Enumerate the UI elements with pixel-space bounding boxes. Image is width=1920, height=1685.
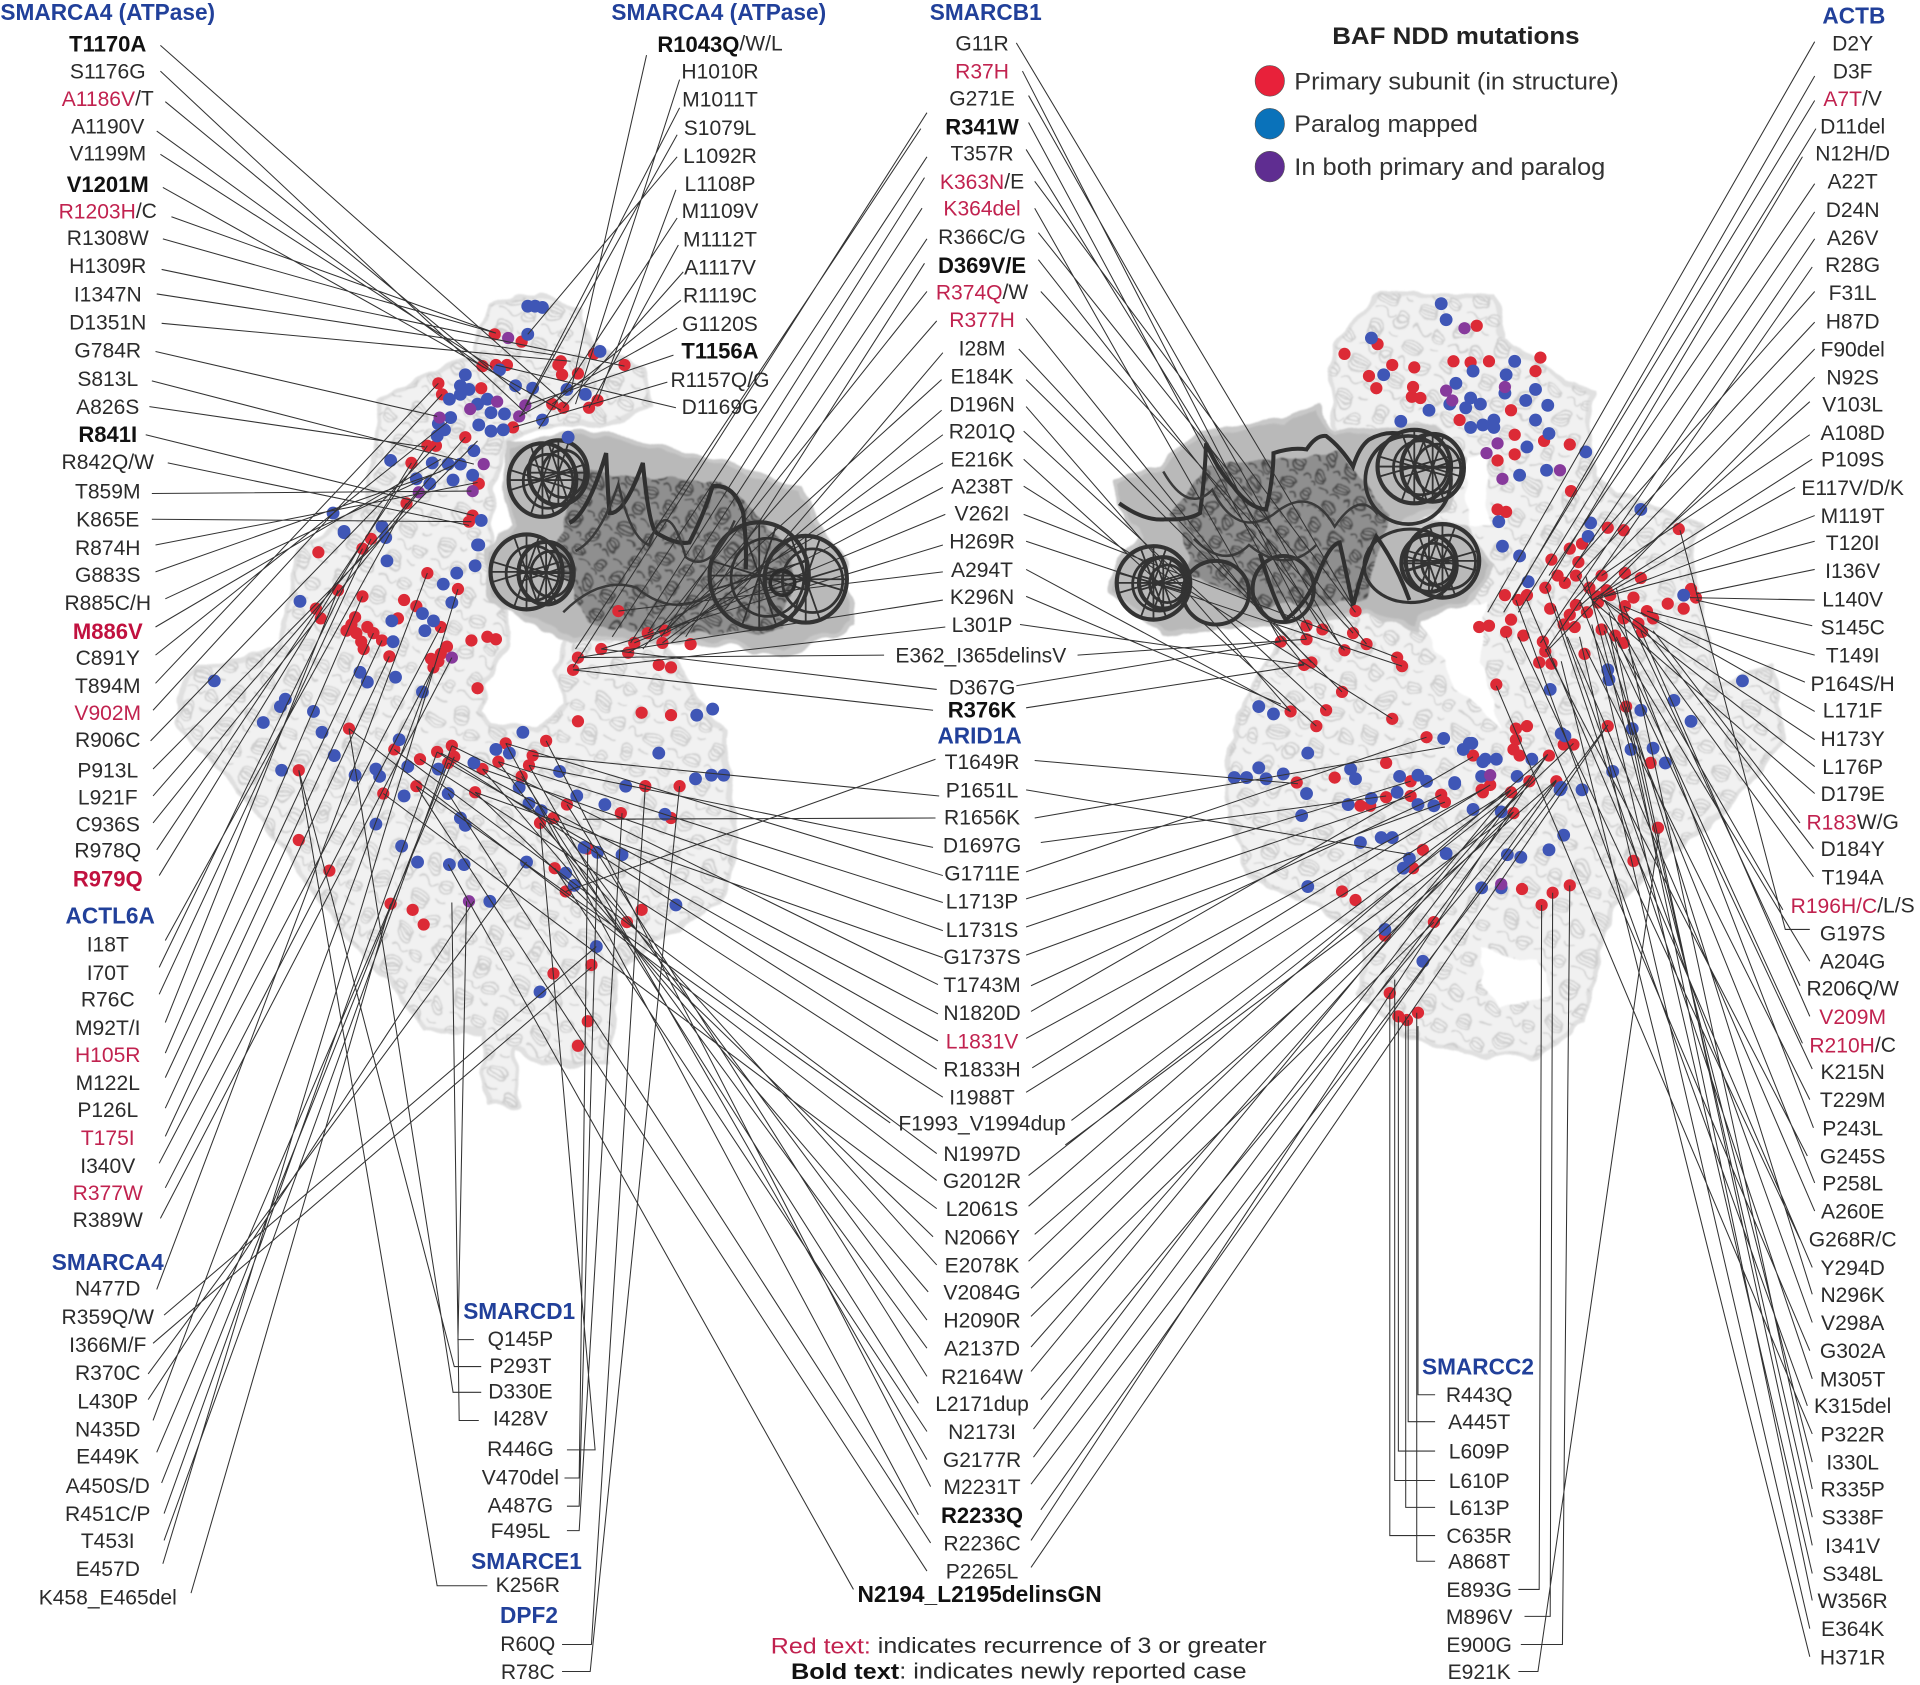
column: SMARCD1 labels: P293T [489,1355,552,1378]
column: ACTB labels [1791,3,1915,1669]
column: ACTB labels: K315del [1814,1395,1891,1418]
column: ACTB labels: S348L [1822,1563,1883,1586]
column: SMARCB1 labels: G271E [949,87,1015,110]
column: ARID1A labels: P1651L [946,779,1018,802]
column: SMARCA4 ATPase labels: A1186V/T [62,87,154,110]
column: ACTB labels: E364K [1821,1618,1884,1641]
column: SMARCA4 ATPase labels: A1190V [71,116,144,139]
column: SMARCA4 ATPase labels: A826S [76,396,139,419]
column: SMARCA4 ATPase upper labels: T1156A [681,339,759,364]
column: ARID1A labels: H2090R [943,1310,1021,1333]
leader lines: ARID1A to left structure [349,729,943,1589]
column: ACTB labels: V103L [1822,394,1883,417]
column: SMARCB1 labels: I28M [959,337,1005,360]
column: SMARCC2 labels: C635R [1446,1525,1512,1548]
column: SMARCD1 labels: V470del [482,1466,559,1489]
column: ACTB labels: A22T [1827,171,1878,194]
column: SMARCA4 ATPase upper labels: H1010R [681,61,759,84]
column: ACTL6A labels: M92T/I [75,1017,141,1040]
column: SMARCA4 ATPase labels: G883S [75,564,141,587]
column: ACTB labels: V209M [1819,1006,1886,1029]
column: SMARCA4 lower labels: E449K [76,1445,139,1468]
column: SMARCA4 lower labels: N477D [75,1278,141,1301]
column: ACTL6A labels: I18T [87,934,129,957]
column: ACTL6A labels [66,903,155,1232]
column: SMARCB1 labels: R201Q [949,421,1015,444]
column: SMARCD1 labels: D330E [488,1381,553,1404]
column: ARID1A labels [857,723,1102,1607]
column: ACTB labels: G268R/C [1809,1229,1897,1252]
column: DPF2 labels: R78C [501,1661,555,1684]
column: ARID1A labels: G2012R [943,1170,1021,1193]
column: SMARCA4 ATPase upper labels: M1011T [682,89,758,112]
column: ACTB labels: D24N [1826,199,1880,222]
column: ARID1A labels: N2194_L2195delinsGN [857,1581,1102,1607]
column: ACTB labels: N12H/D [1815,143,1890,166]
column: SMARCA4 ATPase upper labels: R1043Q/W/L [657,31,783,56]
column: ACTB labels: R335P [1820,1479,1885,1502]
column: ACTB labels: K215N [1820,1061,1885,1084]
leader lines: SMARCC2 [1390,833,1659,1671]
column: ACTB labels: L140V [1822,588,1883,611]
column: SMARCB1 labels: K363N/E [940,171,1024,194]
column: SMARCB1 labels: H269R [949,531,1015,554]
column: ACTB labels: F31L [1829,282,1877,305]
column: ACTB labels: I330L [1826,1452,1879,1475]
column: DPF2 labels [500,1602,558,1684]
column: SMARCB1 labels: R376K [948,698,1016,723]
legend title: BAF NDD mutations [1332,23,1580,50]
column: ACTB labels: S338F [1822,1507,1884,1530]
leader lines: ACTB [1488,42,1816,1657]
column: SMARCA4 ATPase labels: R885C/H [64,592,151,615]
column: SMARCA4 ATPase labels: V902M [74,702,141,725]
column: SMARCA4 ATPase labels: V1201M [67,172,149,197]
heading: DPF2: DPF2 [500,1602,558,1628]
column: ACTB labels: I341V [1825,1535,1880,1558]
column: ACTL6A labels: R389W [73,1209,143,1232]
column: ARID1A labels: L1731S [946,919,1018,942]
column: SMARCA4 ATPase labels: C891Y [76,647,140,670]
column: SMARCC2 labels: R443Q [1446,1384,1513,1407]
column: ACTB labels: L171F [1823,700,1883,723]
column: SMARCA4 ATPase labels: R906C [75,729,141,752]
column: ARID1A labels: N2066Y [944,1226,1020,1249]
mutation dots: primary subunit (red) [299,326,1696,1046]
column: SMARCA4 lower labels: I366M/F [69,1334,146,1357]
column: SMARCA4 lower labels: E457D [76,1558,140,1581]
column: ACTB labels: A260E [1821,1201,1884,1224]
column: SMARCD1 labels: I428V [493,1407,548,1430]
column: ACTB labels: H87D [1826,310,1880,333]
column: SMARCA4 ATPase upper labels: S1079L [684,117,756,140]
column: SMARCB1 labels: K364del [943,198,1021,221]
column: SMARCB1 labels: L301P [952,614,1012,637]
column: ACTB labels: R183W/G [1806,811,1899,834]
column: SMARCB1 labels: E362_I365delinsV [895,645,1066,668]
column: ACTL6A labels: T175I [81,1127,135,1150]
column: ACTB labels: T229M [1820,1089,1885,1112]
heading: SMARCE1: SMARCE1 [471,1548,582,1574]
column: ACTL6A labels: R76C [81,989,135,1012]
structure: left BAF complex surface [173,294,736,1106]
column: ACTB labels: T149I [1826,645,1880,668]
column: ARID1A labels: M2231T [943,1476,1021,1499]
column: ARID1A labels: D1697G [943,834,1021,857]
legend text: both: In both primary and paralog [1294,154,1605,181]
column: ACTB labels: D2Y [1832,32,1873,55]
column: SMARCA4 ATPase upper labels [611,0,826,419]
column: SMARCD1 labels [463,1298,575,1543]
leader lines: SMARCB1 to left structure [573,113,945,710]
column: SMARCA4 ATPase upper labels: D1169G [682,396,758,419]
column: ARID1A labels: N1820D [943,1002,1021,1025]
column: SMARCA4 lower labels [39,1249,177,1609]
column: SMARCB1 labels: G11R [955,32,1009,55]
column: SMARCD1 labels: A487G [488,1494,553,1517]
footnote: bold text key: Bold text : indicates newly reported case [791,1659,1247,1684]
column: ARID1A labels: F1993_V1994dup [898,1112,1066,1135]
column: SMARCA4 ATPase upper labels: M1112T [683,228,757,251]
column: ACTB labels: P243L [1822,1117,1883,1140]
column: SMARCA4 ATPase labels: R978Q [74,839,141,862]
column: ACTL6A labels: H105R [75,1044,141,1067]
column: ACTB labels: A204G [1820,951,1885,974]
column: SMARCA4 lower labels: K458_E465del [39,1586,177,1609]
icon: red dot [1255,66,1284,96]
column: ACTL6A labels: R377W [73,1182,143,1205]
column: SMARCB1 labels: E184K [950,365,1014,388]
column: ARID1A labels: G1711E [944,863,1020,886]
heading: SMARCC2: SMARCC2 [1422,1353,1534,1379]
column: SMARCB1 labels: R341W [945,115,1019,140]
column: ACTL6A labels: I340V [80,1155,135,1178]
column: DPF2 labels: R60Q [500,1633,555,1656]
leader lines: SMARCD1, SMARCE1, DPF2 [299,729,680,1671]
column: SMARCA4 ATPase labels: K865E [76,509,139,532]
column: ACTB labels: H371R [1820,1646,1885,1669]
column: SMARCB1 labels: A294T [951,559,1013,582]
column: ACTB labels: P258L [1822,1172,1883,1195]
column: SMARCA4 ATPase labels: R979Q [73,866,143,891]
column: SMARCB1 labels: D367G [949,676,1015,699]
column: ARID1A labels: T1649R [945,751,1019,774]
icon: purple dot [1255,151,1284,182]
column: SMARCB1 labels: D196N [949,394,1015,417]
structure: left nucleosome [487,431,853,655]
column: ACTB labels: A108D [1820,422,1885,445]
column: SMARCD1 labels: R446G [487,1438,554,1461]
icon: blue dot [1255,108,1284,139]
legend text: primary: Primary subunit (in structure) [1294,68,1619,95]
legend: BAF NDD mutations [1255,23,1619,182]
column: SMARCC2 labels: L609P [1449,1441,1510,1464]
column: SMARCA4 ATPase upper labels: G1120S [682,313,758,336]
leader lines: SMARCA4 lower [148,573,596,1593]
column: ACTB labels: R206Q/W [1806,978,1899,1001]
column: SMARCA4 ATPase labels: R1308W [67,227,149,250]
column: SMARCA4 lower labels: T453I [81,1530,135,1553]
column: ACTB labels: I136V [1825,560,1880,583]
column: ACTB labels: A7T/V [1823,87,1882,110]
column: SMARCA4 ATPase labels: R841I [78,422,137,447]
column: SMARCA4 ATPase labels: D1351N [69,312,146,335]
column: SMARCC2 labels: L613P [1449,1497,1510,1520]
column: SMARCA4 ATPase upper labels: R1157Q/G [670,369,770,392]
column: ACTB labels: M119T [1821,505,1885,528]
structure: right nucleosome [1113,407,1493,633]
column: ACTB labels: M305T [1820,1368,1886,1391]
column: ACTB labels: A26V [1827,227,1878,250]
column: SMARCA4 ATPase labels: M886V [73,619,143,644]
column: SMARCA4 ATPase upper labels: R1119C [683,285,757,308]
column: SMARCB1 labels: R377H [949,309,1015,332]
column: SMARCD1 labels: F495L [491,1520,550,1543]
column: ACTB labels: N92S [1826,367,1879,390]
column: SMARCC2 labels: A868T [1448,1551,1510,1574]
column: SMARCA4 ATPase labels: T894M [75,675,141,698]
column: ARID1A labels: P2265L [946,1561,1018,1584]
column: ARID1A labels: N1997D [943,1143,1021,1166]
column: ACTB labels: R210H/C [1809,1034,1896,1057]
column: SMARCA4 ATPase labels: S1176G [70,61,146,84]
column: SMARCA4 ATPase labels: T859M [75,481,141,504]
column: SMARCA4 ATPase labels: G784R [74,340,141,363]
column: ARID1A labels: I1988T [949,1087,1015,1110]
column: ACTL6A labels: M122L [76,1072,140,1095]
column: ARID1A labels: V2084G [943,1281,1021,1304]
column: ACTB labels: F90del [1820,339,1885,362]
column: ARID1A labels: G1737S [943,946,1021,969]
column: ACTB labels: G302A [1820,1340,1885,1363]
column: SMARCB1 labels: R366C/G [938,226,1026,249]
column: SMARCB1 labels: A238T [951,476,1013,499]
column: ACTB labels: G197S [1820,923,1885,946]
column: SMARCB1 labels: R37H [955,61,1009,84]
column: ACTB labels: R196H/C/L/S [1791,894,1915,917]
column: ACTL6A labels: I70T [87,962,129,985]
column: SMARCB1 labels: T357R [950,143,1014,166]
column: ACTB labels: D11del [1820,116,1885,139]
column: SMARCA4 lower labels: R451C/P [65,1503,150,1526]
column: SMARCA4 ATPase labels: I1347N [74,283,142,306]
column: SMARCA4 lower labels: R370C [75,1362,141,1385]
column: ARID1A labels: R2164W [941,1366,1023,1389]
column: SMARCA4 lower labels: L430P [77,1390,138,1413]
column: SMARCA4 ATPase labels: H1309R [69,255,146,278]
column: SMARCA4 ATPase labels: L921F [78,787,138,810]
column: ACTB labels: G245S [1820,1145,1885,1168]
heading: ACTB: ACTB [1822,3,1885,29]
column: SMARCC2 labels: E921K [1448,1661,1511,1684]
heading: ARID1A: ARID1A [937,723,1022,749]
column: ACTB labels: P322R [1820,1423,1885,1446]
column: SMARCA4 ATPase labels: T1170A [69,31,146,56]
column: SMARCC2 labels: A445T [1448,1411,1510,1434]
column: ACTB labels: T194A [1822,866,1884,889]
column: ARID1A labels: A2137D [944,1338,1020,1361]
leader lines: SMARCA4 ATPase left column [146,45,624,876]
column: ARID1A labels: R1656K [944,806,1020,829]
leader lines: ACTL6A [159,503,452,1218]
column: ACTB labels: P109S [1821,449,1884,472]
column: ARID1A labels: L2061S [946,1198,1018,1221]
mutation dots: paralog mapped (blue) [214,304,1742,992]
mutation dots: in both primary and paralog (purple) [419,328,1560,901]
column: SMARCB1 labels [895,0,1066,723]
column: SMARCB1 labels: K296N [950,586,1014,609]
column: ARID1A labels: L1713P [946,891,1018,914]
column: ARID1A labels: N2173I [948,1421,1016,1444]
column: SMARCE1 labels [471,1548,582,1597]
column: SMARCA4 lower labels: R359Q/W [62,1306,154,1329]
column: ACTB labels: S145C [1820,616,1885,639]
column: SMARCA4 ATPase labels: S813L [77,368,138,391]
column: SMARCC2 labels [1422,1353,1534,1684]
column: SMARCB1 labels: D369V/E [938,253,1026,278]
column: ARID1A labels: L2171dup [935,1393,1029,1416]
leader lines: ARID1A to right structure [1026,725,1608,1567]
column: SMARCA4 ATPase labels: R842Q/W [62,451,154,474]
column: ARID1A labels: R2233Q [941,1503,1023,1528]
column: SMARCA4 ATPase upper labels: M1109V [682,200,758,223]
heading: ACTL6A: ACTL6A [66,903,155,929]
column: ARID1A labels: R2236C [943,1532,1021,1555]
footnote: red text key: Red text: indicates recurrence of 3 or greater [771,1633,1267,1658]
column: SMARCA4 ATPase labels: P913L [77,760,138,783]
column: SMARCC2 labels: L610P [1449,1470,1510,1493]
column: SMARCA4 ATPase labels: R1203H/C [59,200,157,223]
column: ACTB labels: E117V/D/K [1801,477,1904,500]
column: ARID1A labels: T1743M [943,974,1021,997]
column: SMARCA4 lower labels: A450S/D [66,1475,150,1498]
column: SMARCD1 labels: Q145P [488,1328,553,1351]
column: ACTB labels: L176P [1822,756,1883,779]
column: SMARCA4 ATPase labels: C936S [76,814,140,837]
column: ARID1A labels: G2177R [943,1449,1021,1472]
column: ACTB labels: D184Y [1820,838,1885,861]
column: SMARCB1 labels: R374Q/W [936,281,1028,304]
column: ACTB labels: R28G [1825,254,1880,277]
column: ARID1A labels: E2078K [945,1254,1019,1277]
column: ACTB labels: D179E [1820,783,1885,806]
leader lines: SMARCB1 to right structure [1016,43,1402,726]
column: SMARCB1 labels: V262I [955,503,1010,526]
column: SMARCA4 ATPase labels: V1199M [69,143,146,166]
column: SMARCC2 labels: M896V [1446,1606,1513,1629]
column: ACTB labels: H173Y [1820,728,1885,751]
column: SMARCA4 ATPase upper labels: L1108P [684,173,756,196]
column: ACTB labels: P164S/H [1811,673,1895,696]
column: ACTB labels: N296K [1820,1284,1885,1307]
heading: SMARCD1: SMARCD1 [463,1298,575,1324]
column: SMARCA4 ATPase labels: R874H [75,537,141,560]
leader lines: SMARCA4 ATPase upper column [496,55,683,429]
column: SMARCA4 ATPase upper labels: L1092R [683,145,757,168]
column: SMARCB1 labels: E216K [950,449,1014,472]
column: ACTL6A labels: P126L [77,1099,138,1122]
column: ACTB labels: Y294D [1820,1257,1885,1280]
column: SMARCA4 ATPase labels [0,0,215,891]
column: ACTB labels: V298A [1821,1312,1884,1335]
column: ACTB labels: D3F [1833,61,1873,84]
column: SMARCA4 ATPase upper labels: A1117V [684,256,756,279]
column: SMARCC2 labels: E900G [1446,1634,1512,1657]
column: SMARCA4 lower labels: N435D [75,1419,141,1442]
structure: right BAF complex surface [1227,293,1783,1056]
column: SMARCE1 labels: K256R [496,1574,560,1597]
heading: SMARCA4: SMARCA4 [52,1249,164,1275]
column: SMARCC2 labels: E893G [1446,1579,1512,1602]
column: ACTB labels: W356R [1818,1590,1888,1613]
column: ARID1A labels: R1833H [943,1059,1021,1082]
column: ARID1A labels: L1831V [946,1030,1018,1053]
legend text: paralog: Paralog mapped [1294,111,1478,138]
column: ACTB labels: T120I [1826,532,1880,555]
